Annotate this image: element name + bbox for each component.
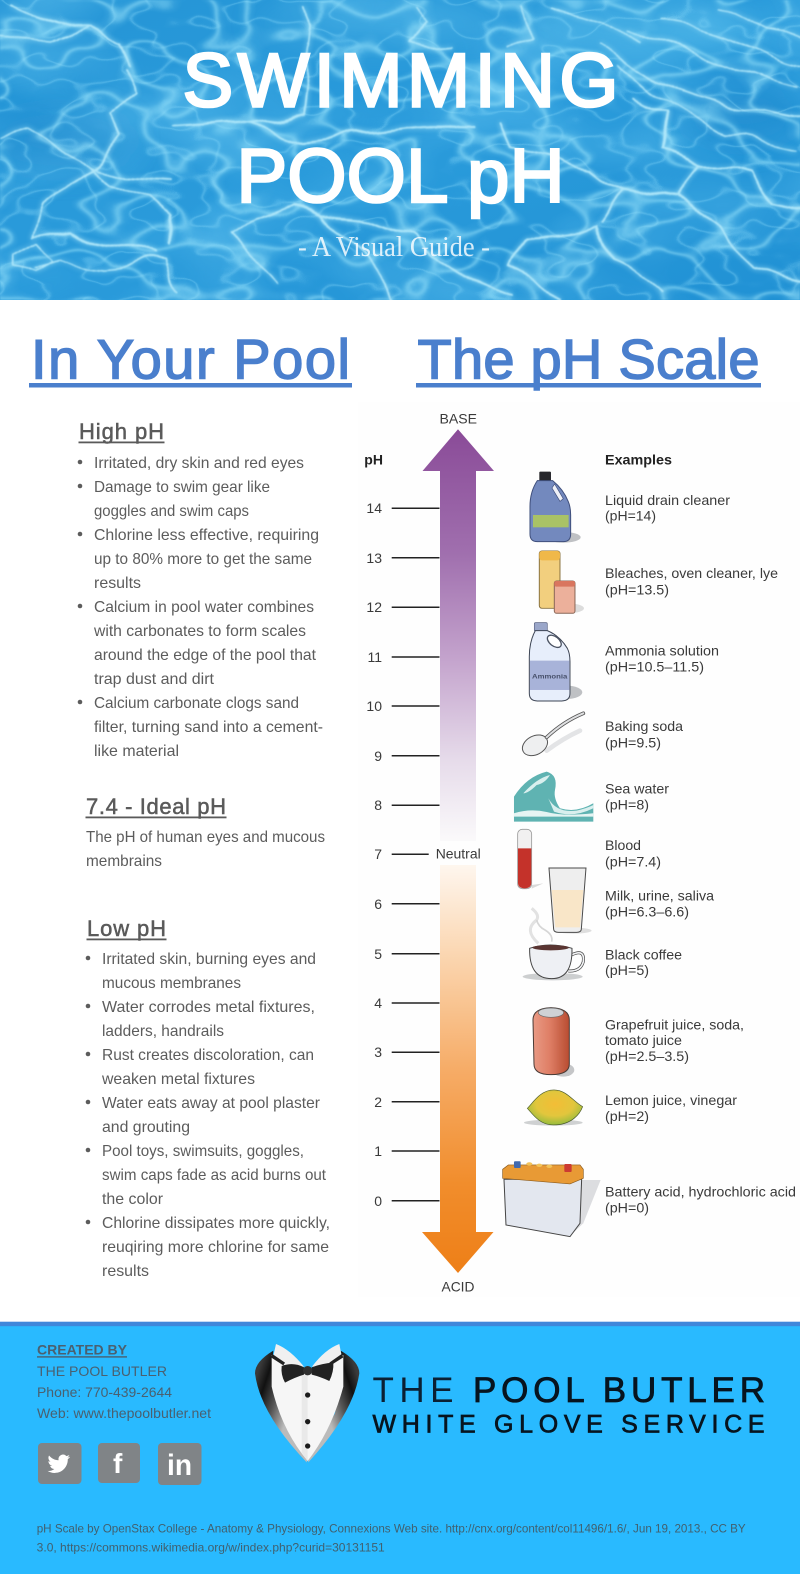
icon: facebook: f xyxy=(113,1448,123,1479)
axis numbers: 7 xyxy=(374,846,382,862)
title xyxy=(182,38,618,219)
label: BASE: BASE xyxy=(440,410,477,426)
high pH bullet list: results xyxy=(94,575,141,592)
logo: wordmark: THE xyxy=(372,1371,454,1410)
high pH bullet list: Calcium carbonate clogs sand xyxy=(94,695,299,712)
examples: ammonia xyxy=(605,643,719,675)
icon: baking soda spoon xyxy=(519,713,583,760)
low pH bullet list: results xyxy=(102,1263,149,1280)
examples: black coffee: (pH=5) xyxy=(605,962,649,978)
axis ticks xyxy=(392,508,440,1201)
label: pH axis: pH xyxy=(364,452,383,468)
examples: milk urine saliva: (pH=6.3–6.6) xyxy=(605,904,689,920)
high pH bullet list: like material xyxy=(94,743,179,760)
icon: glass of milk xyxy=(549,868,592,934)
examples: black coffee xyxy=(605,946,682,978)
heading: In Your Pool: In Your Pool xyxy=(31,328,350,390)
examples: battery acid xyxy=(605,1184,796,1216)
examples: blood: Blood xyxy=(605,837,641,853)
icon: ammonia bottle xyxy=(529,623,582,701)
label: ACID: ACID xyxy=(442,1278,474,1294)
heading: The pH Scale: The pH Scale xyxy=(418,328,760,390)
low pH bullet list: Water eats away at pool plaster xyxy=(102,1095,321,1112)
title: SWIMMING xyxy=(182,38,618,124)
icon: car battery xyxy=(503,1161,601,1237)
examples: milk urine saliva: Milk, urine, saliva xyxy=(605,888,714,904)
axis numbers: 13 xyxy=(366,550,382,566)
examples: blood xyxy=(605,837,661,870)
examples: battery acid: (pH=0) xyxy=(605,1200,649,1216)
examples: black coffee: Black coffee xyxy=(605,946,682,962)
examples: lemon juice: Lemon juice, vinegar xyxy=(605,1092,737,1108)
examples: liquid drain cleaner xyxy=(605,492,730,524)
ideal pH description: The pH of human eyes and mucous xyxy=(86,829,325,846)
panel: footer xyxy=(0,1322,800,1574)
axis numbers: 9 xyxy=(374,748,382,764)
icon: ammonia bottle: Ammonia xyxy=(532,673,568,680)
axis numbers: 1 xyxy=(374,1143,382,1159)
arrow: acid (orange, pointing down) xyxy=(422,865,494,1273)
low pH bullet list: reuqiring more chlorine for same xyxy=(102,1239,329,1256)
examples: grapefruit juice xyxy=(605,1016,744,1064)
logo: wordmark xyxy=(372,1371,765,1439)
axis numbers xyxy=(366,500,382,1209)
icon: coffee cup xyxy=(523,908,583,980)
icon: sea wave xyxy=(514,772,593,822)
low pH bullet list: Pool toys, swimsuits, goggles, xyxy=(102,1143,304,1160)
low pH bullet list: ladders, handrails xyxy=(102,1023,224,1040)
icon: linkedin: in xyxy=(167,1449,192,1482)
title: POOL pH xyxy=(236,134,564,219)
high pH bullet list: Irritated, dry skin and red eyes xyxy=(94,455,304,472)
icon: facebook xyxy=(98,1443,140,1483)
logo: wordmark: WHITE GLOVE SERVICE xyxy=(372,1411,764,1439)
high pH bullet list: around the edge of the pool that xyxy=(94,647,317,664)
examples: sea water: (pH=8) xyxy=(605,796,649,812)
low pH bullet list xyxy=(86,951,330,1280)
panel: High pH xyxy=(78,419,323,760)
examples: baking soda: Baking soda xyxy=(605,718,683,734)
high pH bullet list: with carbonates to form scales xyxy=(93,623,306,640)
icon: soda can xyxy=(533,1008,574,1077)
label: Examples: Examples xyxy=(605,452,672,468)
axis numbers: 0 xyxy=(374,1193,382,1209)
low pH bullet list: mucous membranes xyxy=(102,975,241,992)
subtitle: - A Visual Guide - xyxy=(298,232,490,263)
axis numbers: 2 xyxy=(374,1094,382,1110)
examples: ammonia: Ammonia solution xyxy=(605,643,719,659)
logo: wordmark: POOL BUTLER xyxy=(473,1371,765,1410)
image credit: pH Scale by OpenStax College - Anatomy & Physiology, Connexions Web site. http://cnx.org/content/col11496/1.6/, Jun 19, 2013., CC BY xyxy=(37,1521,746,1535)
icon: bleach and lye containers xyxy=(539,551,584,613)
axis numbers: 4 xyxy=(374,995,382,1011)
examples: baking soda: (pH=9.5) xyxy=(605,734,661,750)
icon: twitter xyxy=(38,1443,82,1484)
low pH bullet list: and grouting xyxy=(102,1119,190,1136)
examples: lemon juice xyxy=(605,1092,737,1124)
image credit xyxy=(37,1521,746,1555)
low pH bullet list: weaken metal fixtures xyxy=(101,1071,255,1088)
heading: 7.4 Ideal pH: 7.4 - Ideal pH xyxy=(86,794,226,819)
examples: liquid drain cleaner: Liquid drain cleaner xyxy=(605,492,730,508)
axis numbers: 6 xyxy=(374,896,382,912)
examples: grapefruit juice: Grapefruit juice, soda, xyxy=(605,1016,744,1032)
low pH bullet list: Water corrodes metal fixtures, xyxy=(102,999,315,1016)
axis numbers: 11 xyxy=(367,649,382,665)
label: Neutral: Neutral xyxy=(436,845,481,861)
high pH bullet list: Calcium in pool water combines xyxy=(94,599,314,616)
examples: blood: (pH=7.4) xyxy=(605,854,661,870)
image credit: 3.0, https://commons.wikimedia.org/w/index.php?curid=30131151 xyxy=(37,1541,385,1555)
axis numbers: 5 xyxy=(374,946,382,962)
examples: battery acid: Battery acid, hydrochloric acid xyxy=(605,1184,796,1200)
examples: bleaches: (pH=13.5) xyxy=(605,581,669,597)
panel: pH scale chart xyxy=(358,402,800,1297)
examples: bleaches: Bleaches, oven cleaner, lye xyxy=(605,565,778,581)
examples: sea water: Sea water xyxy=(605,780,669,796)
high pH bullet list: trap dust and dirt xyxy=(94,671,215,688)
heading: High pH: High pH xyxy=(79,419,164,444)
panel: Low pH xyxy=(86,916,330,1280)
heading: Low pH: Low pH xyxy=(87,916,166,941)
icon: linkedin xyxy=(158,1443,202,1485)
examples: liquid drain cleaner: (pH=14) xyxy=(605,508,656,524)
low pH bullet list: swim caps fade as acid burns out xyxy=(102,1167,327,1184)
icon: lemon xyxy=(524,1090,583,1126)
credits: Phone: 770-439-2644 xyxy=(37,1384,172,1400)
credits: THE POOL BUTLER xyxy=(37,1363,167,1379)
axis numbers: 3 xyxy=(374,1044,382,1060)
low pH bullet list: Rust creates discoloration, can xyxy=(102,1047,314,1064)
icon: drain cleaner jug xyxy=(530,472,581,543)
credits xyxy=(37,1341,211,1421)
credits: CREATED BY xyxy=(37,1341,128,1357)
high pH bullet list: goggles and swim caps xyxy=(94,503,249,520)
examples: bleaches xyxy=(605,565,778,597)
axis numbers: 10 xyxy=(366,698,382,714)
logo: tuxedo xyxy=(255,1344,359,1462)
arrow: base (purple, pointing up) xyxy=(422,429,494,841)
examples: sea water xyxy=(605,780,669,812)
credits: Web: www.thepoolbutler.net xyxy=(37,1405,211,1421)
axis numbers: 12 xyxy=(366,599,382,615)
high pH bullet list: filter, turning sand into a cement- xyxy=(94,719,323,736)
icon: blood test tube xyxy=(518,829,543,889)
high pH bullet list xyxy=(78,455,323,760)
examples: grapefruit juice: (pH=2.5–3.5) xyxy=(605,1048,689,1064)
examples: grapefruit juice: tomato juice xyxy=(605,1032,682,1048)
ideal pH description xyxy=(86,829,325,870)
axis numbers: 8 xyxy=(374,797,382,813)
low pH bullet list: Chlorine dissipates more quickly, xyxy=(102,1215,330,1232)
examples: baking soda xyxy=(605,718,683,750)
examples: lemon juice: (pH=2) xyxy=(605,1108,649,1124)
examples: milk urine saliva xyxy=(605,888,714,920)
low pH bullet list: Irritated skin, burning eyes and xyxy=(102,951,316,968)
high pH bullet list: Damage to swim gear like xyxy=(94,479,270,496)
ideal pH description: membrains xyxy=(86,853,162,870)
high pH bullet list: up to 80% more to get the same xyxy=(94,551,312,568)
low pH bullet list: the color xyxy=(102,1191,164,1208)
high pH bullet list: Chlorine less effective, requiring xyxy=(94,527,319,544)
axis numbers: 14 xyxy=(366,500,382,516)
examples: ammonia: (pH=10.5–11.5) xyxy=(605,659,704,675)
panel: Ideal pH xyxy=(86,794,325,870)
panel: water header xyxy=(0,0,800,300)
